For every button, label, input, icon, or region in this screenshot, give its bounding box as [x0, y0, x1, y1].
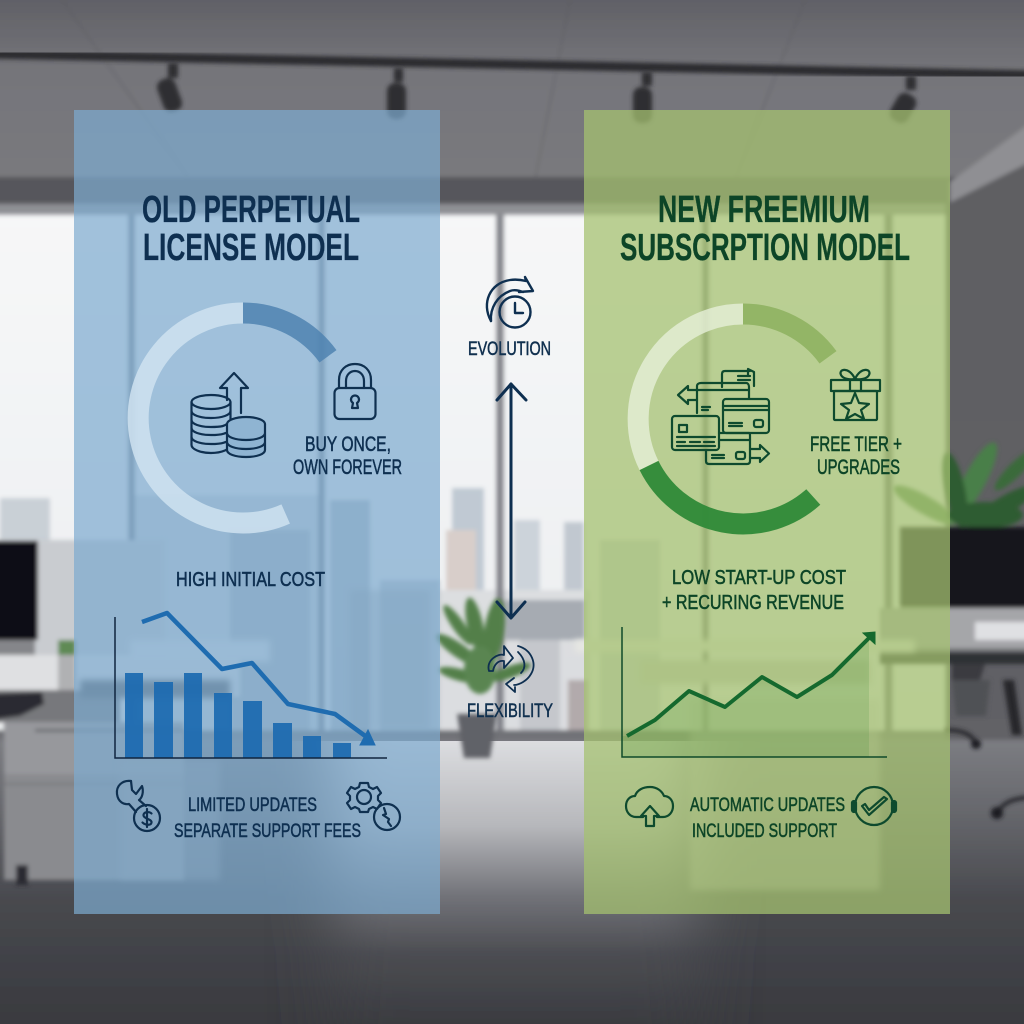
text: automatic updates, included support — [690, 794, 845, 842]
left desk — [0, 540, 165, 665]
text: low start-up cost + recurring revenue: LOW START-UP COST — [672, 567, 846, 589]
center plant — [433, 596, 533, 694]
icon: cloud upload — [626, 787, 673, 826]
text: automatic updates, included support: AUTOMATIC UPDATES — [690, 794, 845, 816]
title: new model: NEW FREEMIUM — [658, 189, 870, 231]
right wall — [945, 160, 1024, 760]
right desk and plant — [889, 438, 1024, 531]
title: old model: OLD PERPETUAL — [142, 189, 360, 231]
icon: clock with sweeping arrow — [487, 277, 533, 328]
panel: new freemium subscription model — [584, 110, 950, 914]
text: free tier + upgrades: UPGRADES — [817, 455, 900, 479]
donut chart: new model — [638, 314, 828, 524]
panel background green — [584, 110, 950, 914]
chart: growing line with area — [622, 627, 887, 757]
donut chart: old model — [138, 313, 328, 523]
text: automatic updates, included support: INCLUDED SUPPORT — [692, 820, 837, 842]
text: flexibility: FLEXIBILITY — [467, 700, 553, 722]
text: free tier + upgrades — [810, 432, 902, 479]
center column: evolution to flexibility — [467, 277, 553, 722]
icon: wrench with dollar coin — [117, 781, 160, 831]
title: old model: LICENSE MODEL — [143, 227, 359, 269]
panel: old perpetual license model — [74, 110, 440, 914]
rail — [0, 54, 1024, 75]
icon: gift box with star — [831, 370, 880, 420]
icon: support check badge — [852, 787, 896, 825]
text: buy once own forever: OWN FOREVER — [293, 455, 402, 479]
icon: gear with falling coin — [347, 783, 400, 830]
text: limited updates, separate support fees — [174, 794, 361, 842]
floor — [0, 740, 1024, 1024]
floor light pool — [330, 741, 700, 1024]
skyline — [0, 488, 660, 740]
track lights — [155, 63, 919, 126]
text: buy once own forever — [293, 432, 402, 479]
text: limited updates, separate support fees: LIMITED UPDATES — [188, 794, 317, 816]
icon: coins with up arrow — [192, 373, 265, 457]
text: high initial cost: HIGH INITIAL COST — [176, 569, 325, 591]
double-headed arrow — [497, 384, 526, 618]
panel background blue — [74, 110, 440, 914]
icon: padlock — [334, 364, 376, 419]
text: limited updates, separate support fees: SEPARATE SUPPORT FEES — [174, 820, 361, 842]
text: buy once own forever: BUY ONCE, — [305, 432, 391, 456]
text: low start-up cost + recurring revenue: + RECURING REVENUE — [662, 592, 844, 614]
chart: declining bars with trend arrow — [115, 613, 387, 758]
text: low start-up cost + recurring revenue — [662, 567, 846, 614]
text: free tier + upgrades: FREE TIER + — [810, 432, 902, 456]
text: evolution: EVOLUTION — [468, 338, 551, 360]
window mullions — [128, 215, 135, 740]
title: new model — [620, 189, 910, 269]
icon: credit cards with arrows — [672, 369, 769, 464]
icon: flexibility arrows — [489, 646, 533, 692]
title: old model — [142, 189, 360, 269]
